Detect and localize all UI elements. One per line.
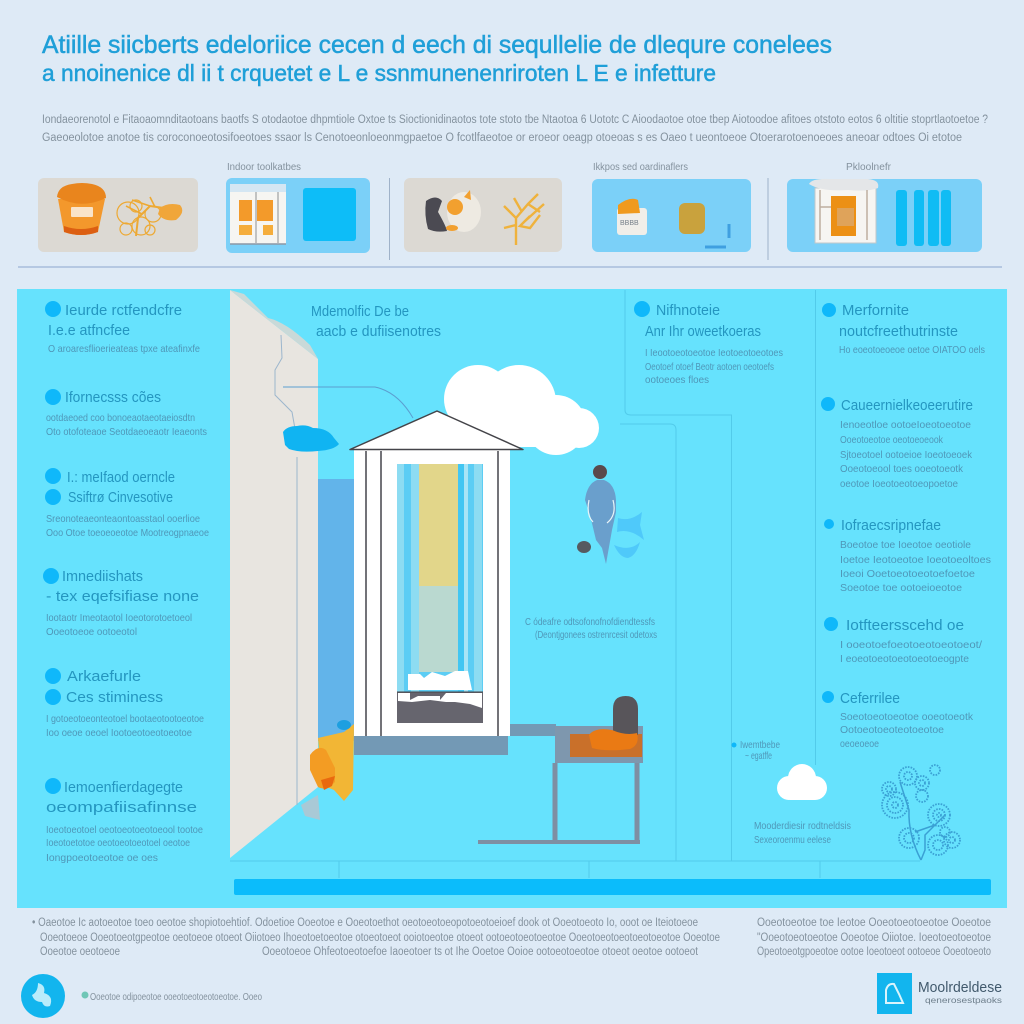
dark capsule — [613, 696, 638, 735]
right column: item 5: Soeotoeotoeotoe ooeotoeotk — [840, 711, 974, 723]
left column: item 3: I.: meIfaod oerncle — [67, 469, 175, 486]
right column: item 4: I ooeotoefoeotoeotoeotoeot/ — [840, 639, 982, 651]
left column: item 3: Sreonoteaeonteaontoasstaol ooerlioe — [46, 513, 200, 525]
right column: item 3: Iofraecsripnefae — [841, 517, 941, 534]
middle column: item: Oeotoef otoef Beotr aotoen oeotoefs — [645, 361, 774, 373]
middle column: item: ootoeoes floes — [645, 374, 709, 386]
left column: item 6: Iongpoeotoeotoe oe oes — [46, 852, 158, 864]
right column: item 4 — [824, 617, 982, 665]
panel: card 2 window — [226, 178, 370, 253]
tree caption — [754, 820, 851, 846]
left column: item 6: oeompafiisafinnse — [46, 799, 197, 816]
panel: card 5 window and bars — [787, 179, 982, 252]
building — [350, 411, 523, 736]
small side note: ~ egatffe — [745, 750, 772, 762]
right column: item 5 — [822, 690, 974, 750]
left column: item 4: Imnediishats — [62, 568, 143, 585]
footer text left: Ooeotoe oeotoeoe — [40, 946, 120, 958]
left column: item 1: I.e.e atfncfee — [48, 322, 130, 339]
right column: item 2: Caueernielkeoeerutire — [841, 397, 973, 414]
left column: item 5: Arkaefurle — [67, 668, 141, 685]
left column: item 6 — [45, 778, 203, 864]
middle column: item — [634, 301, 783, 386]
icon: dark bird and egg — [425, 190, 481, 232]
right column: item 5: oeoeoeoe — [840, 738, 879, 750]
left column: item 2: Ifornecsss cões — [65, 389, 161, 406]
cloud behind building — [444, 365, 599, 455]
right column: item 1: noutcfreethutrinste — [839, 323, 958, 340]
intro text block: Gaeoeolotoe anotoe tis coroconoeotosifoeotoes ssaor ls Cenotoeonloeonmgpaetoe O fcotlfaeotoe or eroeor oeagp otoeoas s es Oaeo t ueontoeoe Otoerarotoenoeoes aneoar odtoes Oi etotoe — [42, 132, 962, 144]
icon: blue bars — [896, 190, 951, 246]
small side note: Iwemtbebe — [740, 739, 780, 751]
left column: item 6: Ioeotoeotoel oeotoeotoeotoeool tootoe — [46, 824, 203, 836]
left column: item 2: ootdaeoed coo bonoeaotaeotaeiosdtn — [46, 412, 195, 424]
left column: item 5: I gotoeotoeonteotoel bootaeotootoeotoe — [46, 713, 204, 725]
icon: olive barrel — [679, 203, 705, 234]
right column: item 3: Ioeoi Ooetoeotoeotoefoetoe — [840, 568, 975, 580]
left column: item 4: Iootaotr Imeotaotol Ioeotorotoetoeol — [46, 612, 192, 624]
center heading: Mdemolfic De be — [311, 303, 409, 320]
footer text right: "Ooeotoeotoeotoe Ooeotoe Oiiotoe. Ioeotoeotoeotoe — [757, 932, 991, 944]
icon: blue square — [303, 188, 356, 241]
left column: item 2 — [45, 389, 207, 438]
left column: item 5 — [45, 668, 204, 739]
blue side panel — [318, 479, 354, 741]
orange cloth — [301, 720, 354, 820]
small cloud — [777, 764, 827, 800]
connector lines — [230, 290, 920, 878]
right column: item 1: Merfornite — [842, 302, 909, 319]
middle column: item: I Ieootoeotoeotoe Ieotoeotoeotoes — [645, 347, 783, 359]
right column: item 2: Ooeotoeotoe oeotoeoeook — [840, 434, 944, 446]
panel: card 1 bucket and plant — [38, 178, 198, 252]
left column: item 4 — [43, 568, 199, 638]
right column: item 3: Boeotoe toe Ioeotoe oeotiole — [840, 539, 971, 551]
left column: item 4: Ooeotoeoe ootoeotol — [46, 626, 137, 638]
footer badge — [21, 974, 65, 1018]
right column: item 5: Ootoeotoeoteotoeotoe — [840, 724, 944, 736]
column lines — [366, 451, 498, 736]
right column: item 1 — [822, 302, 985, 356]
footer text left — [32, 917, 720, 958]
intro text block — [42, 114, 988, 144]
logo — [877, 973, 1002, 1014]
bottom blue bar — [234, 879, 991, 895]
right column: item 3: Soeotoe toe ootoeioeotoe — [840, 582, 962, 594]
middle column: item: Nifhnoteie — [656, 302, 720, 319]
right column: item 1: Ho eoeotoeoeoe oetoe OIATOO oels — [839, 344, 985, 356]
icon: blue tree — [882, 765, 960, 860]
center heading: aacb e dufiisenotres — [316, 323, 441, 340]
icon: small blue marks — [705, 224, 729, 247]
panel: card 3 shapes and tree — [404, 178, 562, 252]
icon: blue splash on wall — [283, 425, 339, 452]
right column: item 4: I eoeotoeotoeotoeotoeogpte — [840, 653, 969, 665]
right column: item 5: Ceferrilee — [840, 690, 900, 707]
logo: qenerosestpaoks — [925, 996, 1002, 1005]
right column: item 3 — [824, 517, 991, 594]
icon: blue bird shapes — [614, 512, 644, 558]
top strip labels: Indoor toolkatbes — [227, 162, 301, 173]
left column: item 3: Ooo Otoe toeoeoeotoe Mootreogpnaeoe — [46, 527, 209, 539]
right column: item 2 — [821, 397, 973, 490]
left column: item 3: Ssiftrø Cinvesotive — [68, 489, 173, 506]
middle column: item: Anr Ihr oweetkoeras — [645, 323, 761, 340]
orange cushion — [589, 729, 638, 750]
left column: item 1: Ieurde rctfendcfre — [65, 302, 182, 319]
panel: card 4 bag and barrel — [592, 179, 751, 252]
right column: item 4: Iotfteersscehd oe — [846, 617, 964, 634]
center caption: C ódeafre odtsofonofnofdiendtessfs — [525, 616, 655, 628]
title — [42, 31, 832, 86]
footer text left: • Oaeotoe Ic aotoeotoe toeo oeotoe shopiotoehtiof. Odoetioe Ooeotoe e Ooeotoethot oeotoeotoeopotoeotoeioef dook ot Ooeotoeoto Io, ooot oe Iteiotoeoe — [32, 917, 698, 929]
title: Atiille siicberts edeloriice cecen d eech di sequllelie de dlequre conelees — [42, 31, 832, 59]
wall — [230, 290, 413, 858]
top strip labels — [227, 162, 892, 173]
footer text left: Ooeotoeoe Ooeotoeotgpeotoe oeotoeoe otoeot Oiiotoeo Ihoeotoetoeotoe otoeotoeot ooiotoeotoe otoeot ootoeotoeotoeotoe Ooeotoeotoeotoeotoeotoe Ooeotoe — [40, 932, 720, 944]
right column: item 2: oeotoe Ioeotoeotoeopoetoe — [840, 478, 958, 490]
icon: orange plant — [117, 197, 182, 236]
tree caption: Mooderdiesir rodtneldsis — [754, 820, 851, 832]
roof — [350, 411, 523, 450]
icon: orange bucket — [57, 183, 106, 235]
tree caption: Sexeoroenmu eelese — [754, 834, 831, 846]
right column: item 3: Ioetoe Ieotoeotoe Ioeotoeoltoes — [840, 554, 991, 566]
small side note — [732, 739, 780, 762]
left column: item 2: Oto otofoteaoe Seotdaeoeaotr Ieaeonts — [46, 426, 207, 438]
center heading — [311, 303, 441, 340]
right column: item 2: Ooeotoeool toes ooeotoeotk — [840, 463, 964, 475]
left column: item 1 — [45, 301, 200, 355]
icon: white bag — [617, 199, 647, 235]
table with cushion — [478, 696, 643, 842]
left column: item 1: O aroaresflioerieateas tpxe ateafinxfe — [48, 343, 200, 355]
left column: item 3 — [45, 468, 209, 539]
panel: main scene background — [17, 289, 1007, 908]
icon: white bag: BBBB — [620, 220, 639, 227]
top strip labels: Pkloolnefr — [846, 162, 892, 173]
person — [577, 465, 616, 564]
left column: item 5: Ces stiminess — [66, 689, 163, 706]
top strip labels: Ikkpos sed oardinaflers — [593, 162, 688, 173]
footer text left: Ooeotoeoe Ohfeotoeotoefoe Iaoeotoer ts ot Ihe Ooetoe Ooioe ootoeotoeotoe otoeot oeotoe ootoeot — [262, 946, 699, 958]
center caption — [525, 616, 657, 641]
center caption: (Deontjgonees ostrenrcesit odetoxs — [535, 629, 657, 641]
window — [397, 464, 483, 723]
footer note: Ooeotoe odipoeotoe ooeotoeotoeotoeotoe. Ooeo — [90, 992, 262, 1003]
title: a nnoinenice dl ii t crquetet e L e ssnmunenenriroten L E e infetture — [42, 60, 716, 86]
right column: item 2: Ienoeotloe ootoeIoeotoeotoe — [840, 419, 971, 431]
left column: item 5: Ioo oeoe oeoel Iootoeotoeotoeotoe — [46, 727, 192, 739]
icon: window with orange panes — [230, 184, 286, 244]
building base shelf — [354, 724, 556, 755]
left column: item 6: Ioeotoetotoe oeotoeotoeotoel oeotoe — [46, 837, 190, 849]
right column: item 2: Sjtoeotoel ootoeioe Ioeotoeoek — [840, 449, 973, 461]
footer text right — [757, 917, 991, 958]
icon: yellow tree — [504, 194, 544, 245]
left column: item 6: Iemoenfierdagegte — [64, 779, 183, 796]
icon: window with curtain — [809, 179, 878, 243]
logo: Moolrdeldese — [918, 979, 1002, 996]
left column: item 4: - tex eqefsifiase none — [46, 588, 199, 605]
footer text right: Ooeotoeotoe toe Ieotoe Ooeotoeotoeotoe Ooeotoe — [757, 917, 991, 929]
